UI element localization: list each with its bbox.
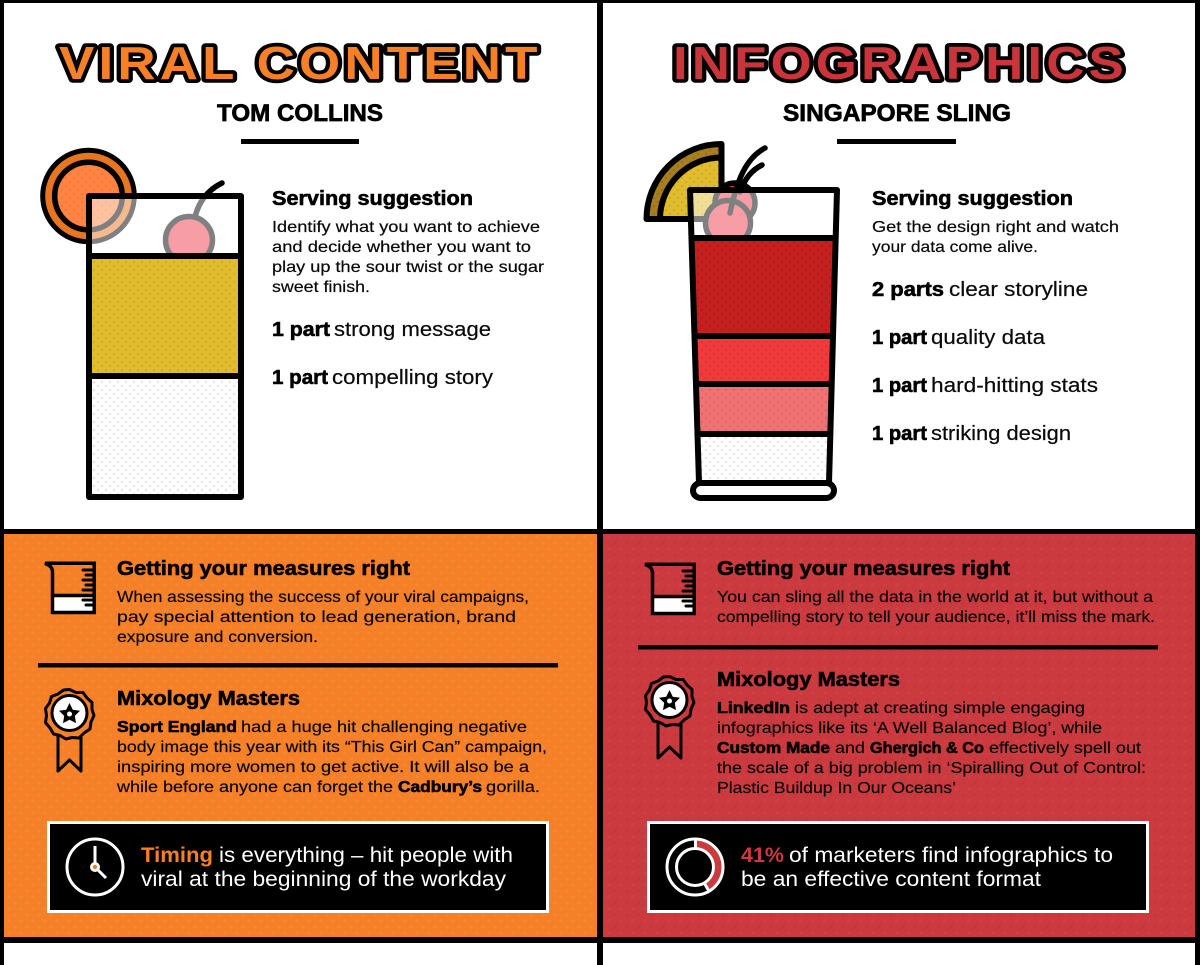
text: right measures: Getting your measures right bbox=[717, 558, 1010, 580]
text: right serving suggestion: Get the design right and watch bbox=[872, 219, 1119, 236]
text: right measures: You can sling all the data in the world at it, but without a bbox=[717, 589, 1153, 606]
icon: beaker left bbox=[45, 563, 95, 612]
title: infographics: INFOGRAPHICS bbox=[673, 37, 1124, 89]
text: left mixology masters: Cadbury’s bbox=[398, 779, 482, 796]
text: left measures: Getting your measures right bbox=[117, 558, 410, 580]
text: left mixology masters: had a huge hit challenging negative bbox=[241, 719, 527, 736]
icon: medal left bbox=[46, 690, 94, 771]
callout: timing bbox=[48, 822, 548, 912]
text: right mixology masters: Custom Made bbox=[717, 740, 830, 757]
text: right measures bbox=[717, 558, 1155, 626]
callout: 41 percent bbox=[648, 822, 1148, 912]
text: left serving suggestion: play up the sour twist or the sugar bbox=[272, 259, 545, 276]
ingredients: left: compelling story bbox=[332, 367, 493, 389]
text: right serving suggestion: your data come alive. bbox=[872, 239, 1038, 256]
ingredients: left: 1 part bbox=[272, 367, 328, 389]
text: right mixology masters: the scale of a big problem in ‘Spiralling Out of Control: bbox=[717, 760, 1146, 777]
text: left measures: pay special attention to lead generation, brand bbox=[117, 609, 516, 626]
underline right bbox=[837, 139, 956, 144]
callout: timing: Timing bbox=[141, 844, 213, 867]
ingredients: right: striking design bbox=[931, 423, 1071, 445]
text: right mixology masters: Mixology Masters bbox=[717, 669, 900, 691]
text: left serving suggestion: sweet finish. bbox=[272, 279, 370, 296]
ingredients: left: 1 part bbox=[272, 319, 330, 341]
ingredients: right: clear storyline bbox=[949, 279, 1088, 301]
text: left serving suggestion: Serving suggestion bbox=[272, 188, 473, 210]
callout: 41 percent: be an effective content format bbox=[741, 868, 1041, 891]
text: left measures bbox=[117, 558, 529, 646]
ingredients: right: 1 part bbox=[872, 327, 927, 349]
text: right mixology masters bbox=[717, 669, 1146, 797]
subtitle: tom collins: TOM COLLINS bbox=[217, 100, 383, 127]
divider right bbox=[638, 645, 1158, 650]
ingredients: left: strong message bbox=[334, 319, 491, 341]
icon: medal right bbox=[646, 676, 694, 758]
illustration: singapore sling glass bbox=[646, 144, 837, 498]
text: right mixology masters: effectively spell out bbox=[989, 740, 1142, 757]
text: right mixology masters: LinkedIn bbox=[717, 700, 790, 717]
ingredients: right: 2 parts bbox=[872, 279, 944, 301]
text: right mixology masters: Ghergich & Co bbox=[870, 740, 984, 757]
title: viral content: VIRAL CONTENT bbox=[59, 37, 537, 89]
text: left serving suggestion bbox=[272, 188, 545, 296]
text: left mixology masters: while before anyone can forget the bbox=[116, 779, 393, 796]
callout: timing: viral at the beginning of the workday bbox=[141, 868, 507, 891]
ingredients: right: 1 part bbox=[872, 375, 927, 397]
text: right mixology masters: and bbox=[835, 740, 865, 757]
text: left serving suggestion: Identify what you want to achieve bbox=[272, 219, 540, 236]
callout: 41 percent: of marketers find infographics to bbox=[789, 844, 1113, 867]
icon: beaker right bbox=[645, 564, 695, 614]
callout: 41 percent: 41% bbox=[741, 844, 784, 867]
ingredients: left bbox=[272, 319, 493, 389]
ingredients: right: hard-hitting stats bbox=[931, 375, 1098, 397]
text: left measures: When assessing the success of your viral campaigns, bbox=[117, 589, 529, 606]
text: left mixology masters bbox=[116, 688, 547, 796]
text: left mixology masters: Mixology Masters bbox=[117, 688, 300, 710]
ingredients: right bbox=[872, 279, 1098, 445]
text: right mixology masters: is adept at creating simple engaging bbox=[795, 700, 1085, 717]
text: left mixology masters: gorilla. bbox=[486, 779, 540, 796]
text: right mixology masters: Plastic Buildup In Our Oceans’ bbox=[717, 780, 956, 797]
callout: timing: is everything – hit people with bbox=[219, 844, 513, 867]
text: right measures: compelling story to tell your audience, it’ll miss the mark. bbox=[717, 609, 1155, 626]
icon: clock bbox=[67, 839, 123, 895]
text: right serving suggestion bbox=[872, 188, 1119, 256]
text: left mixology masters: body image this year with its “This Girl Can” campaign, bbox=[117, 739, 547, 756]
text: left serving suggestion: and decide whether you want to bbox=[272, 239, 531, 256]
divider left bbox=[38, 663, 558, 668]
text: right mixology masters: infographics like its ‘A Well Balanced Blog’, while bbox=[717, 720, 1102, 737]
underline left bbox=[241, 139, 359, 144]
text: right serving suggestion: Serving suggestion bbox=[872, 188, 1073, 210]
ingredients: right: 1 part bbox=[872, 423, 927, 445]
subtitle: singapore sling: SINGAPORE SLING bbox=[783, 100, 1011, 127]
illustration: tom collins glass bbox=[43, 150, 241, 497]
icon: donut chart bbox=[667, 839, 723, 895]
ingredients: right: quality data bbox=[931, 327, 1046, 349]
text: left mixology masters: Sport England bbox=[117, 719, 237, 736]
text: left measures: exposure and conversion. bbox=[117, 629, 318, 646]
text: left mixology masters: inspiring more women to get active. It will also be a bbox=[117, 759, 529, 776]
